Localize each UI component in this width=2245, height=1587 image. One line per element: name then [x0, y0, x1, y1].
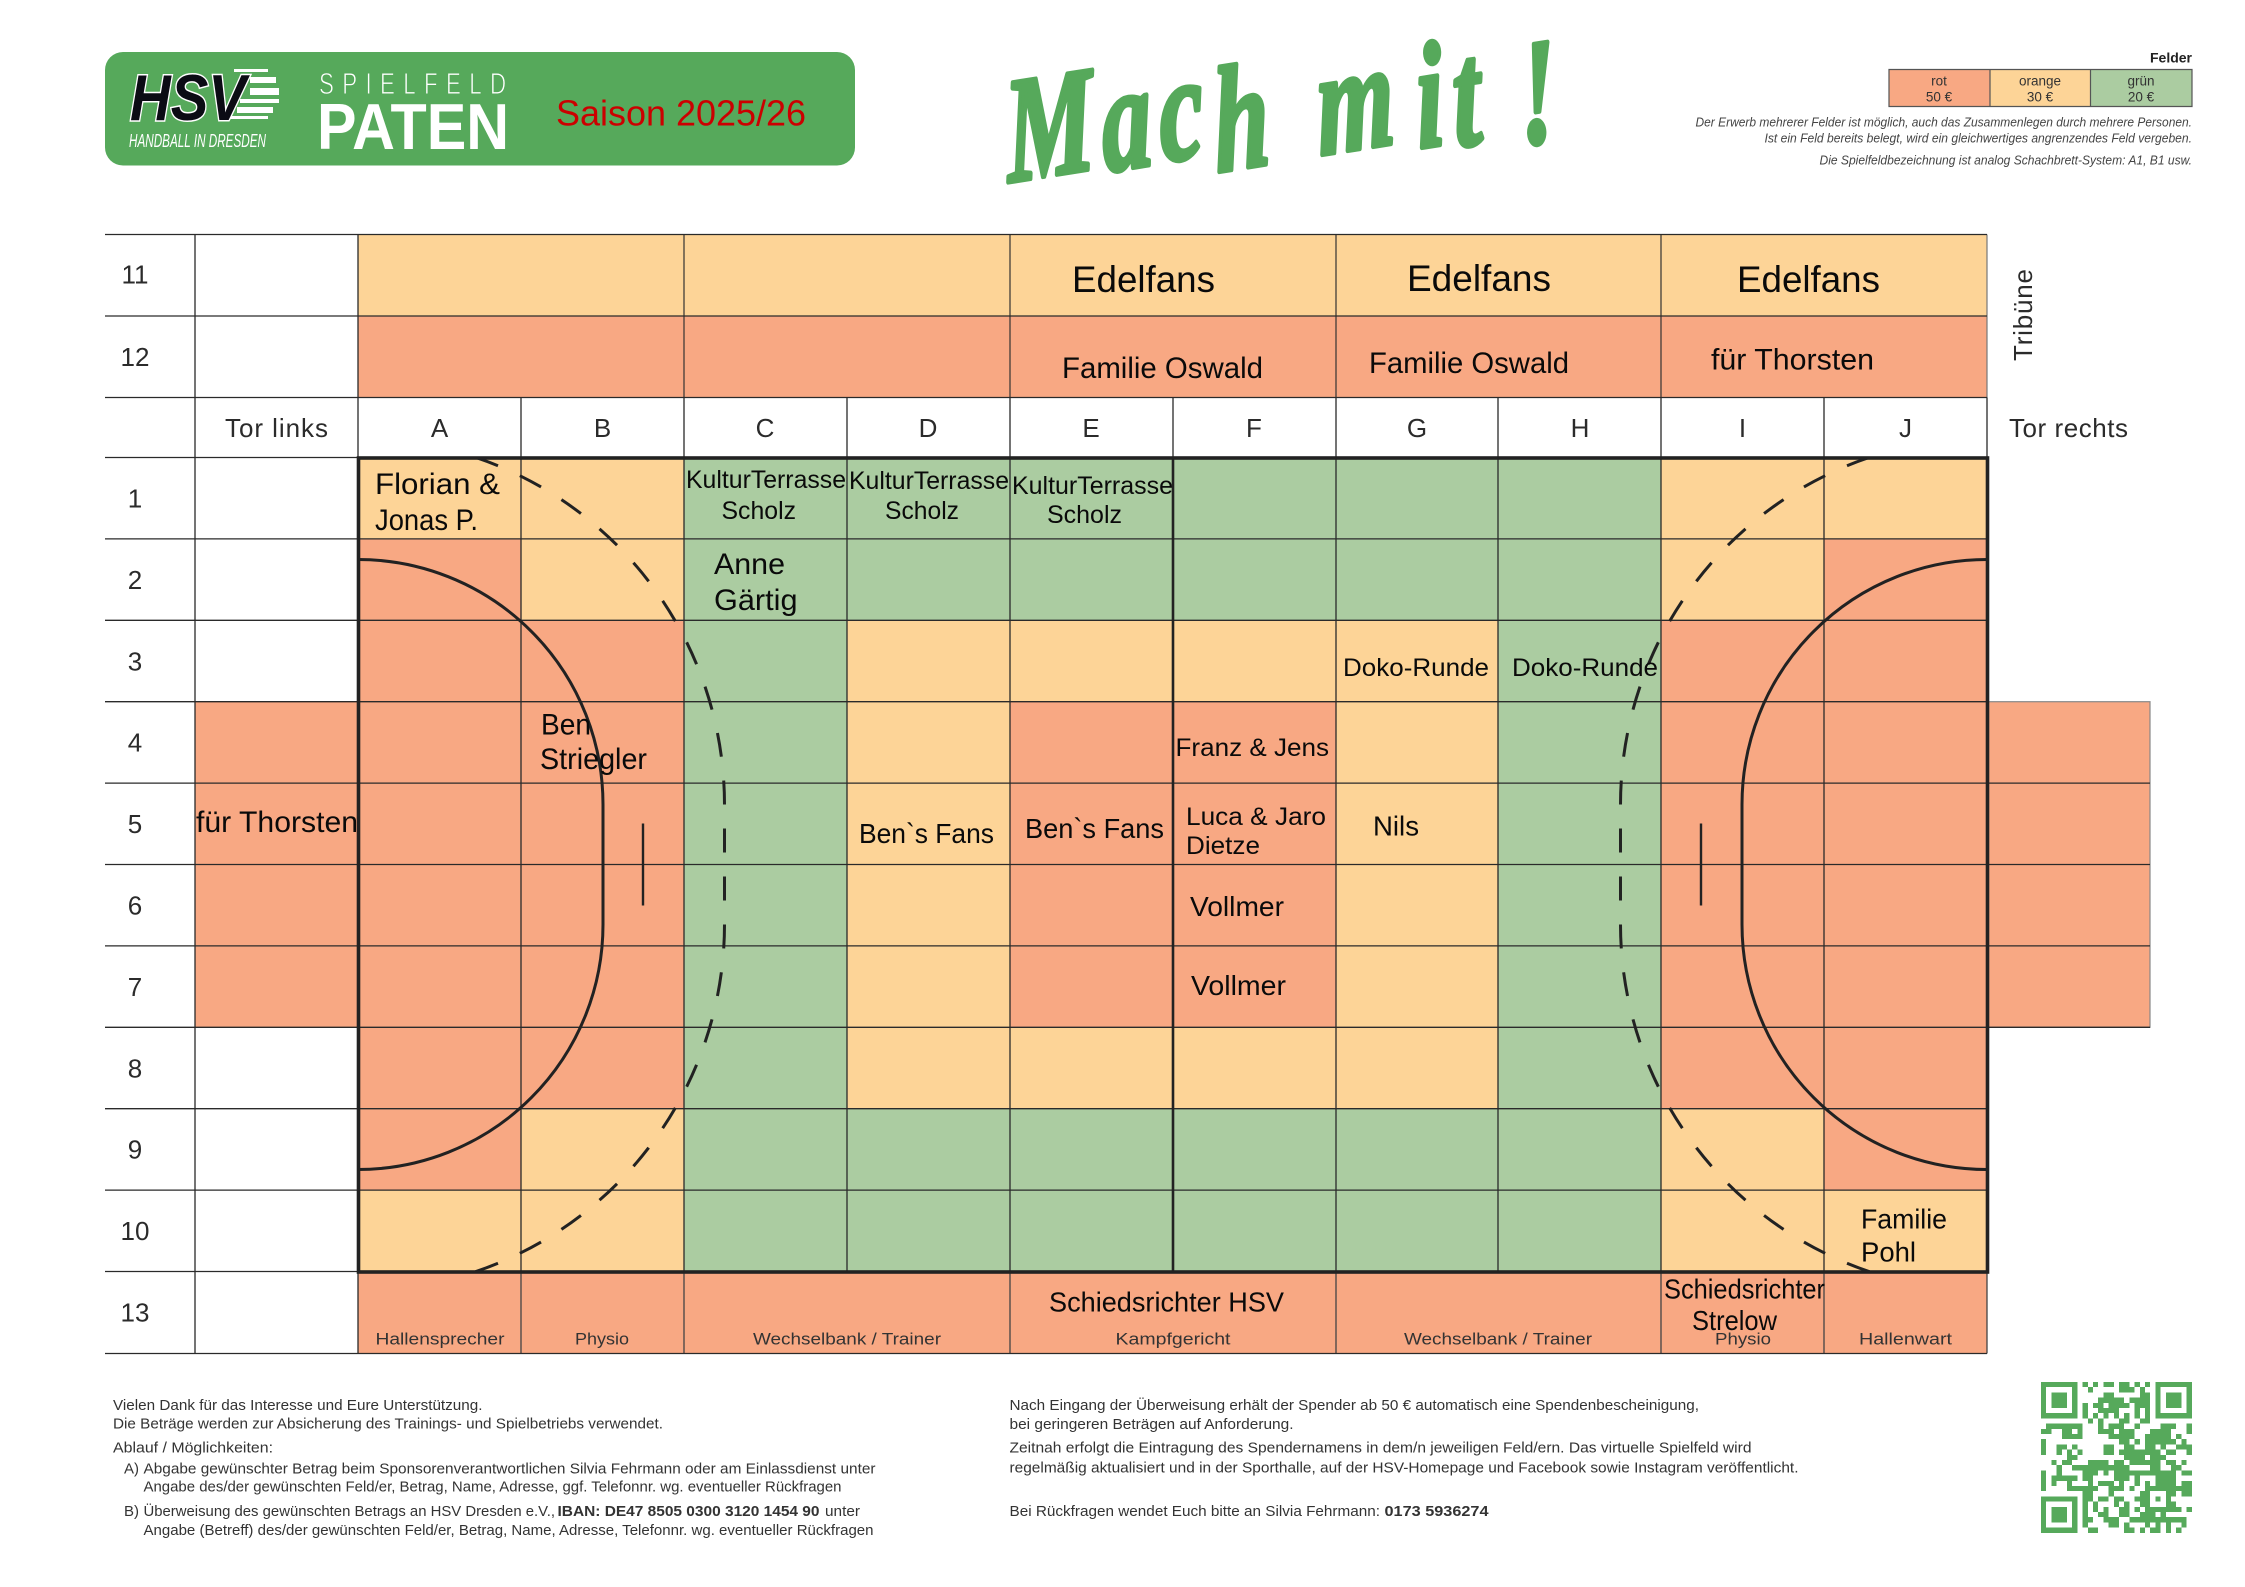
sponsor names: Franz & Jens [1176, 734, 1329, 762]
column labels: Tor rechts [2009, 413, 2128, 443]
sponsor names: Gärtig [714, 584, 798, 617]
sponsor names: KulturTerrasse [849, 467, 1009, 495]
row labels: 13 [121, 1298, 149, 1328]
column labels: F [1246, 413, 1262, 443]
sponsor names: Familie Oswald [1369, 347, 1569, 380]
footer: thank-you and procedure: IBAN: DE47 8505 0300 3120 1454 90 [558, 1503, 820, 1520]
sponsor names: Pohl [1861, 1236, 1916, 1268]
sponsor names: Luca & Jaro [1186, 803, 1326, 831]
column labels: B [594, 413, 611, 443]
legend: field prices: rot [1931, 74, 1947, 88]
footer: thank-you and procedure: Angabe des/der gewünschten Feld/er, Betrag, Name, Adresse, ggf. Telefonnr. wg. eventueller Rückfragen [144, 1478, 842, 1496]
row labels: 5 [128, 809, 142, 839]
panel: row 13 officials: Wechselbank / Trainer [753, 1330, 941, 1348]
footer: donation receipt and contact: regelmäßig aktualisiert und in der Sporthalle, auf der HSV-Homepage und Facebook sowie Instagram veröffentlicht. [1010, 1460, 1798, 1476]
column labels: J [1899, 413, 1912, 443]
sponsor names: Nils [1373, 810, 1419, 842]
tribune label: Tribüne [2008, 269, 2038, 361]
panel: row 13 officials: Wechselbank / Trainer [1404, 1330, 1592, 1348]
row labels: 12 [121, 342, 149, 372]
footer: thank-you and procedure: Überweisung des gewünschten Betrags an HSV Dresden e.V., [144, 1502, 555, 1520]
column labels: C [756, 413, 774, 443]
spielfeld paten wordmark: SPIELFELD [319, 66, 506, 101]
panel: goal-side fields left [195, 702, 358, 1027]
panel: row 13 officials: Hallenwart [1859, 1330, 1952, 1348]
sponsor names: Vollmer [1191, 970, 1286, 1001]
sponsor names: Edelfans [1737, 259, 1880, 300]
row labels: 1 [128, 484, 142, 514]
column labels: G [1407, 413, 1427, 443]
legend: field prices: 30 € [2027, 90, 2054, 104]
footer: thank-you and procedure: B) [124, 1503, 139, 1520]
row labels: 10 [121, 1216, 149, 1246]
legend: field prices: 50 € [1926, 90, 1953, 104]
sponsor names: Florian & [375, 468, 500, 501]
panel: row 13 officials: Physio [1715, 1330, 1771, 1348]
sponsor names: für Thorsten [196, 806, 358, 839]
sponsor names: Edelfans [1072, 259, 1215, 300]
legend: field prices: 20 € [2128, 90, 2155, 104]
sponsor names: Edelfans [1407, 258, 1551, 299]
seven-metre marks [643, 824, 1701, 906]
footer: thank-you and procedure [113, 1397, 876, 1539]
footer: thank-you and procedure: A) [124, 1460, 139, 1478]
sponsor names: KulturTerrasse [1012, 472, 1173, 500]
title: Mach mit: Mach mit! [998, 7, 1563, 215]
column labels: Tor links [225, 413, 328, 443]
sponsor names: Jonas P. [375, 504, 478, 537]
right nine-metre dashed line [1619, 460, 1870, 1270]
sponsor names: Scholz [885, 497, 959, 525]
sponsor names: für Thorsten [1711, 344, 1874, 376]
legend: field prices: Felder [2150, 50, 2193, 66]
panel: row 13 officials: Kampfgericht [1116, 1330, 1231, 1348]
left six-metre line [358, 560, 603, 1170]
season label: Saison 2025/26 [556, 94, 806, 134]
row labels: 3 [128, 646, 142, 676]
sponsor names: Vollmer [1190, 891, 1284, 922]
row labels: 7 [128, 972, 142, 1002]
panel: row 13 officials: Physio [575, 1330, 629, 1348]
row labels: 9 [128, 1135, 142, 1165]
sponsor names: Doko-Runde [1343, 654, 1489, 682]
sponsor names: Schiedsrichter HSV [1049, 1286, 1284, 1318]
court markings [358, 438, 1988, 1291]
column labels: I [1739, 413, 1746, 443]
column labels [225, 413, 2128, 443]
sponsor names: Ben [541, 708, 591, 742]
footer: thank-you and procedure: Angabe (Betreff) des/der gewünschten Feld/er, Betrag, Name, Adresse, Telefonnr. wg. eventueller Rückfragen [144, 1522, 874, 1539]
sponsor names: KulturTerrasse [686, 466, 846, 494]
footer: thank-you and procedure: Abgabe gewünschter Betrag beim Sponsorenverantwortlichen Silvia Fehrmann oder am Einlassdienst unter [144, 1460, 876, 1478]
sponsor names: Ben`s Fans [859, 818, 994, 849]
row labels: 6 [128, 890, 142, 920]
sponsor names: Scholz [1047, 501, 1122, 529]
footer: donation receipt and contact: 0173 5936274 [1384, 1503, 1489, 1520]
legend: field prices: Ist ein Feld bereits belegt, wird ein gleichwertiges angrenzendes Feld vergeben. [1764, 130, 2192, 146]
footer: donation receipt and contact: Nach Eingang der Überweisung erhält der Spender ab 50 € automatisch eine Spendenbescheinigung, [1010, 1396, 1699, 1414]
sponsor names: Familie Oswald [1062, 352, 1263, 385]
sponsor names: Doko-Runde [1512, 654, 1658, 682]
panel: tribune rows 11 and 12 [358, 234, 1987, 398]
field frame [358, 458, 1988, 1272]
centre line [1172, 458, 1174, 1272]
icon: HSV logo: HSV [130, 61, 250, 134]
right six-metre line [1742, 560, 1987, 1170]
header banner [105, 52, 855, 166]
footer: donation receipt and contact: Bei Rückfragen wendet Euch bitte an Silvia Fehrmann: [1010, 1503, 1380, 1520]
footer: donation receipt and contact: Zeitnah erfolgt die Eintragung des Spendernamens in dem/n jeweiligen Feld/ern. Das virtuelle Spielfeld wird [1010, 1440, 1752, 1456]
panel: goal-side fields right [1987, 702, 2150, 1027]
sponsor names: Scholz [722, 497, 796, 525]
sponsor names: Anne [714, 548, 785, 581]
row labels: 11 [122, 260, 148, 290]
panel: row 13 officials [358, 1272, 1987, 1354]
legend: field prices: Die Spielfeldbezeichnung ist analog Schachbrett-System: A1, B1 usw. [1820, 152, 2192, 168]
row labels: 8 [128, 1053, 142, 1083]
sponsor names: Strelow [1692, 1305, 1778, 1336]
legend: field prices: grün [2127, 74, 2155, 88]
panel: playing field cells [358, 458, 1987, 1272]
legend: field prices [1696, 50, 2193, 168]
column labels: A [431, 413, 449, 443]
left nine-metre dashed line [475, 460, 726, 1270]
panel: row 13 officials: Hallensprecher [376, 1330, 505, 1348]
sponsor names: Dietze [1186, 832, 1260, 860]
footer: thank-you and procedure: Vielen Dank für das Interesse und Eure Unterstützung. [113, 1397, 483, 1414]
legend: field prices: orange [2019, 74, 2061, 88]
icon: HSV logo: HANDBALL IN DRESDEN [129, 131, 267, 151]
sponsor names: Schiedsrichter [1664, 1274, 1825, 1304]
footer: thank-you and procedure: unter [825, 1503, 860, 1520]
column labels: E [1082, 413, 1100, 443]
column labels: H [1571, 413, 1589, 443]
spielfeld paten wordmark: PATEN [317, 90, 509, 163]
sponsor names: Familie [1861, 1204, 1947, 1234]
footer: thank-you and procedure: Ablauf / Möglichkeiten: [113, 1440, 273, 1456]
footer: thank-you and procedure: Die Beträge werden zur Absicherung des Trainings- und Spielbetriebs verwendet. [113, 1416, 663, 1432]
row labels: 2 [128, 565, 142, 595]
row labels [121, 260, 149, 1328]
sponsor names: Ben`s Fans [1025, 813, 1164, 844]
legend: field prices: Der Erwerb mehrerer Felder ist möglich, auch das Zusammenlegen durch mehrere Personen. [1696, 114, 2192, 130]
sponsor names [196, 258, 1947, 1336]
icon: QR code [2041, 1382, 2192, 1533]
column labels: D [919, 413, 937, 443]
sponsor names: Striegler [540, 743, 647, 776]
footer: donation receipt and contact: bei geringeren Beträgen auf Anforderung. [1010, 1416, 1294, 1433]
footer: donation receipt and contact [1010, 1396, 1798, 1520]
row labels: 4 [128, 728, 142, 758]
